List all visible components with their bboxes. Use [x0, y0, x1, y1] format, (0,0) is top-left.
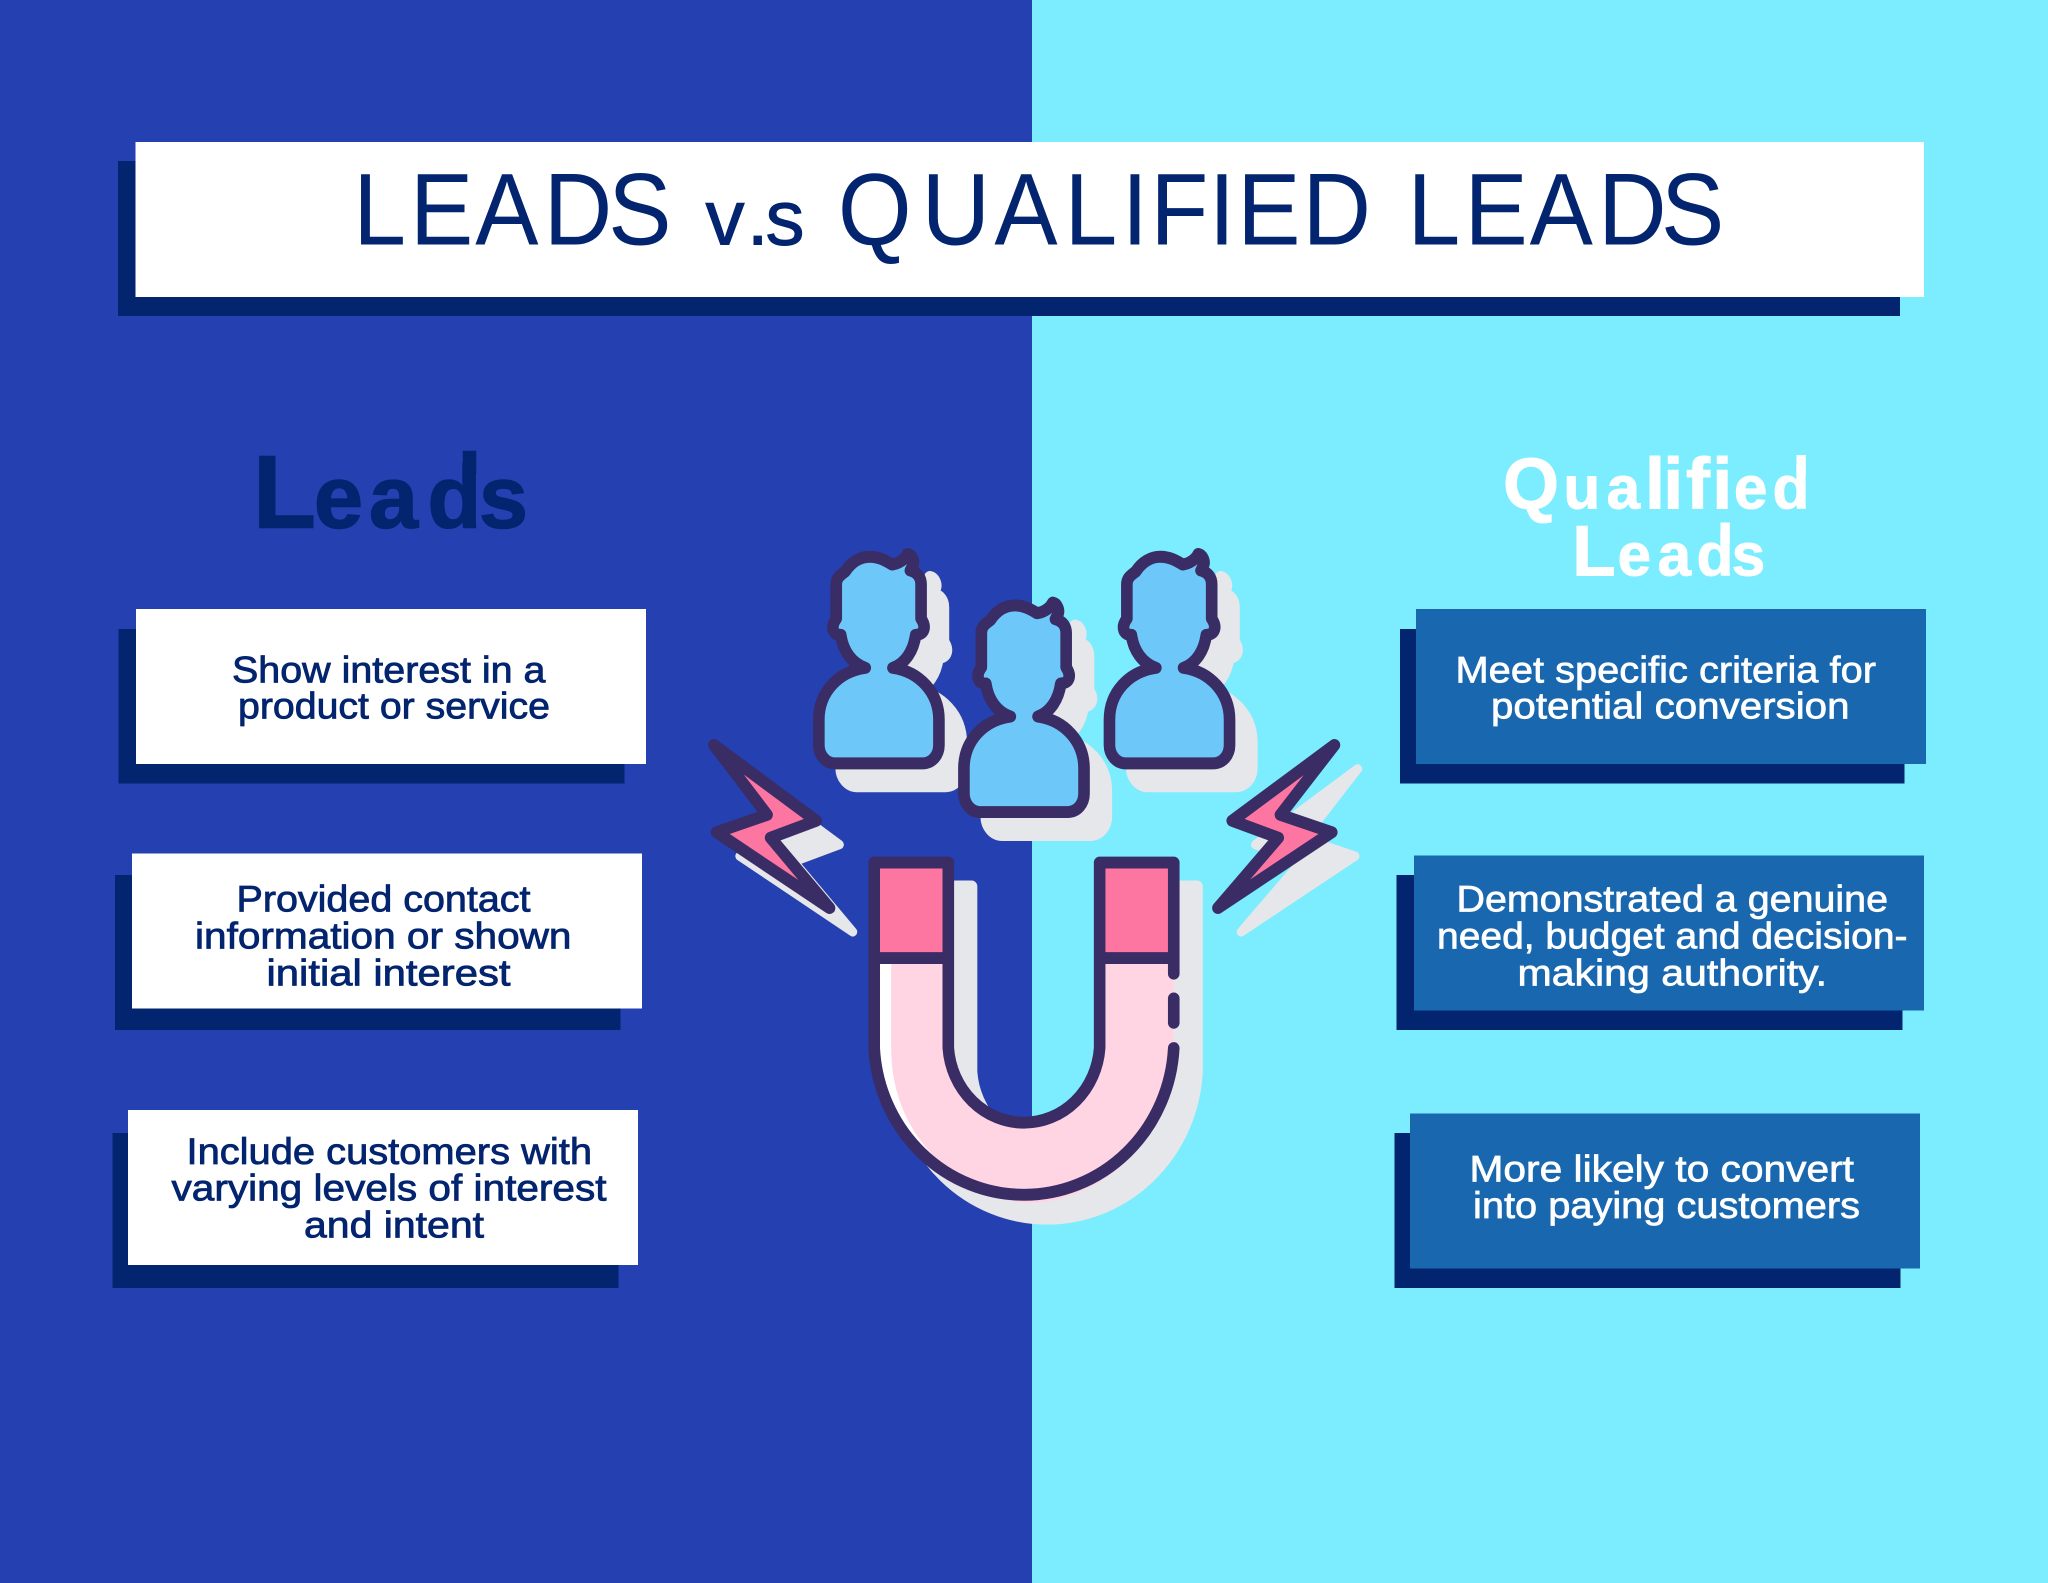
- icon: magnet attracting people: [714, 554, 1358, 1219]
- card text: information or shown: [195, 915, 572, 956]
- card text: Meet specific criteria for: [1456, 650, 1876, 691]
- heading: Qualified Leads: s: [1732, 522, 1765, 589]
- title text: LEADS: [353, 153, 671, 266]
- card text: [195, 879, 572, 993]
- title banner panel: [136, 142, 1924, 297]
- heading: Qualified Leads: a: [1607, 454, 1641, 521]
- card text: varying levels of interest: [172, 1168, 607, 1208]
- background: right light cyan half: [1032, 0, 2048, 1583]
- card text: More likely to convert: [1470, 1148, 1855, 1190]
- heading: Qualified Leads: d: [1773, 454, 1809, 521]
- panel: lead card 1: [118, 609, 646, 784]
- card text: and intent: [304, 1204, 485, 1245]
- title banner: [118, 142, 1924, 316]
- card text: Demonstrated a genuine: [1456, 879, 1888, 920]
- heading: Qualified Leads: e: [1734, 454, 1767, 521]
- card text: [232, 650, 550, 726]
- background: left dark blue half: [0, 0, 1032, 1583]
- heading: Qualified Leads: a: [1658, 522, 1692, 589]
- icon: left lightning bolt: [714, 745, 853, 932]
- panel: qualified card 1: [1400, 609, 1926, 784]
- icon: person left: [819, 554, 961, 786]
- card text: Show interest in a: [232, 650, 546, 691]
- heading: Leads: a: [369, 447, 419, 546]
- card text: [1437, 879, 1908, 993]
- heading: Qualified Leads: e: [1618, 522, 1651, 589]
- title text: QUALIFIED: [838, 153, 1371, 266]
- heading: Leads: e: [314, 447, 363, 546]
- card text: initial interest: [266, 952, 511, 993]
- title text: LEADS: [1407, 153, 1724, 266]
- panel: lead card 2: [115, 854, 642, 1030]
- heading: Leads: L: [253, 434, 316, 549]
- heading: Leads: s: [479, 447, 528, 546]
- card text: into paying customers: [1473, 1185, 1860, 1226]
- heading: Qualified Leads: d: [1697, 522, 1733, 589]
- title text: [353, 153, 1724, 266]
- panel: lead card 3: [112, 1110, 638, 1288]
- card text: [172, 1131, 607, 1245]
- title banner shadow: [118, 161, 1900, 316]
- card text: Provided contact: [236, 879, 531, 920]
- card text: need, budget and decision-: [1437, 915, 1908, 956]
- heading: Qualified Leads: i: [1663, 444, 1683, 524]
- heading: Qualified Leads: i: [1712, 444, 1732, 524]
- card text: [1470, 1148, 1860, 1226]
- heading: Leads: d: [428, 447, 481, 546]
- icon: person right: [1109, 554, 1252, 786]
- card text: making authority.: [1518, 952, 1827, 993]
- heading: Qualified Leads: f: [1686, 444, 1711, 524]
- heading: Qualified Leads: Q: [1503, 444, 1559, 524]
- panel: qualified card 3: [1394, 1114, 1920, 1288]
- heading: Qualified Leads: [1503, 444, 1809, 592]
- heading: Qualified Leads: l: [1645, 444, 1665, 524]
- heading: Qualified Leads: u: [1564, 454, 1600, 521]
- card text: potential conversion: [1491, 686, 1850, 726]
- heading: Leads: [253, 434, 528, 549]
- card text: product or service: [238, 686, 550, 726]
- icon: horseshoe magnet: [874, 863, 1197, 1219]
- icon: right lightning bolt: [1218, 745, 1358, 932]
- card text: [1456, 650, 1876, 726]
- panel: qualified card 2: [1396, 856, 1924, 1030]
- card text: Include customers with: [186, 1131, 592, 1172]
- title text: v.s: [706, 174, 804, 262]
- icon: person middle: [964, 603, 1106, 835]
- heading: Qualified Leads: L: [1572, 513, 1616, 592]
